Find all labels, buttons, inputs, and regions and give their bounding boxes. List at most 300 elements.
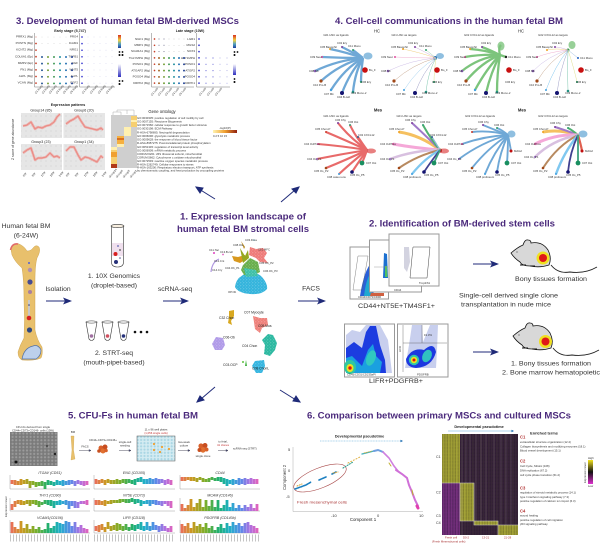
network: HSC as ligands, HC: C02 Ery xyxy=(337,41,348,45)
text block: enriched terms: cell cycle phase transition (61.2) xyxy=(520,473,560,477)
line charts: expression patterns: 9W xyxy=(31,172,37,178)
dot plot: early stage: PRRX1 (Mg) xyxy=(16,34,33,38)
dot plot: late stage: HLY1MPH xyxy=(181,56,195,60)
line charts: expression patterns: Expression patterns xyxy=(51,103,85,107)
dot plot: early stage: FGF2 xyxy=(70,80,78,84)
panel: cell-cell communications xyxy=(304,16,593,179)
network: CXCL12 as targets, HC: C07 Mk xyxy=(540,92,550,96)
line charts: expression patterns: 12W xyxy=(83,170,90,178)
diagram: CFU-F workflow: CD44+CD73+CD146+ xyxy=(89,438,117,442)
legend: heatmap colour bar: Low xyxy=(588,484,594,488)
diagram: CFU-F workflow xyxy=(71,428,257,461)
diagram: CFU-F workflow: 11 x 96 well plates xyxy=(145,428,168,432)
network: HSC as ligands, Mes: C05 Chon-P xyxy=(315,127,331,131)
network: HSC as targets, HC: Bo_F xyxy=(441,68,448,72)
dot plot: late stage: KRPK2 (Mg) xyxy=(133,81,150,85)
network: CXCL12 as targets, HC: C08 NK xyxy=(525,69,535,73)
panel: development of MSCs xyxy=(11,16,239,179)
chart: FACS density right: PDGFRB xyxy=(417,372,429,376)
arrow: to mouse 1 xyxy=(473,260,499,268)
arrow: scRNA-seq: scRNA-seq xyxy=(158,286,192,293)
dot plot: early stage: C2 Early xyxy=(41,83,51,95)
chart: FACS density left xyxy=(344,324,394,377)
panel: primary vs cultured MSCs xyxy=(282,410,594,544)
text block: gene ontology terms: GO:0009628: the response of blood tissue factor xyxy=(137,138,197,142)
network: CXCL12 as targets, Mes: C07 Ost xyxy=(582,161,592,165)
network: HSC as ligands, Mes: C06 Ost xyxy=(348,120,358,124)
chart: pseudotime trajectory: 10 xyxy=(419,513,424,518)
dot plot: early stage: TGFB1 xyxy=(68,54,78,58)
text: 10X Genomics xyxy=(88,273,141,290)
chart: stacked FACS gates: Trop2/61 xyxy=(419,281,431,285)
icon: STRT-seq wells xyxy=(86,321,148,340)
chart: UMAP of BM stromal cells: C06.Ob_P3 xyxy=(263,269,278,273)
text block: gene ontology terms: by chemiosmotic coupling, and heat production by uncoupling proteins xyxy=(137,168,225,172)
chart: pseudotime heatmap xyxy=(432,425,518,544)
chart: stacked FACS gates xyxy=(350,234,439,299)
heading: section 1: 1. Expression landscape of xyxy=(180,212,307,222)
chart: violin plots of marker genes: PDGFRB (CD140b) xyxy=(204,516,236,520)
icon: mouse 2 xyxy=(513,323,599,355)
text block: enriched terms: p53 signaling pathway xyxy=(520,522,548,526)
network: HSC as targets, Mes: C07 Ost xyxy=(438,161,448,165)
chart: pseudotime trajectory: -5 xyxy=(286,494,290,499)
text block: gene ontology terms: GO:0072593: reactive oxygen species metabolic process xyxy=(137,159,208,163)
chart: stacked FACS gates: CD44 xyxy=(394,288,402,292)
network: HSC as targets, HC: C11 Mono xyxy=(419,44,432,48)
network: CXCL12 as ligands, Mes: C08 prolineum xyxy=(476,175,495,179)
arrows: between sections xyxy=(196,187,300,402)
network: HSC as targets, Mes: C05 Os_P5 xyxy=(424,173,439,177)
network: CXCL12 as targets, Mes: C04 Os_P1 xyxy=(524,155,539,159)
chart: pseudotime trajectory: 0 xyxy=(288,468,291,473)
dot plot: early stage: C1 Early xyxy=(34,83,44,95)
legend: heatmap colour bar xyxy=(583,456,594,488)
diagram: CFU-F workflow: 41 clones xyxy=(217,443,230,447)
text block: gene ontology terms: -log10(P) xyxy=(219,126,231,130)
text: LIFR+PDGFRB+: LIFR+PDGFRB+ xyxy=(369,378,423,385)
text: transplantation note xyxy=(459,292,558,308)
network: HSC as ligands, Mes xyxy=(304,114,376,179)
chart: stacked FACS gates: CD44/CD73/CD90 xyxy=(358,295,381,299)
dot plot: early stage: ICAM1 xyxy=(69,41,78,45)
diagram: CFU-F workflow: culture xyxy=(180,444,189,448)
dot plot: late stage: POSO1 (Mg) xyxy=(133,62,150,66)
network: CXCL12 as targets, Mes xyxy=(524,114,593,179)
network: CXCL12 as targets, Mes: C05 Os_P5 xyxy=(566,173,581,177)
text block: enriched terms: wound healing xyxy=(520,514,538,518)
dot plot: early stage: ALPL xyxy=(71,74,78,78)
icon: femur bone xyxy=(10,243,42,360)
network: CXCL12 as ligands, Mes: C04 Os_P1 xyxy=(447,157,462,161)
chart: pseudotime trajectory: Component 2 xyxy=(282,464,287,490)
network: HSC as ligands, Mes: C02 CXCL12 xyxy=(358,133,375,137)
diagram: CFU-F workflow: scRNA seq (STRT) xyxy=(233,446,257,450)
text block: gene ontology terms xyxy=(137,109,237,172)
diagram: CFU-F workflow: two-week xyxy=(178,440,191,444)
network: CXCL12 as ligands, HC: C07 Mk xyxy=(468,92,478,96)
dot plot: late stage: C3 Late xyxy=(164,86,173,97)
network: HSC as ligands, Mes: G01 HSC as ligands xyxy=(323,114,349,118)
dot plot: early stage: WNT5 xyxy=(70,68,78,72)
text block: gene ontology terms: GO:0030335: positive regulation of cell motility by cell xyxy=(137,116,204,120)
text: mouse 2 outcomes: 1. Bony tissues formation xyxy=(511,360,591,368)
network: CXCL12 as targets, Mes: C05 Chon-P xyxy=(533,127,549,131)
network: HSC as ligands, HC: C05 Basophil xyxy=(320,45,337,49)
dot plot: late stage: C1 Late xyxy=(198,86,207,97)
network: HSC as targets, HC: C05 Basophil xyxy=(391,45,408,49)
chart: UMAP of cartilage cells: C03.OCP xyxy=(223,363,238,367)
chart: pseudotime trajectory: Fresh mesenchymal cells xyxy=(297,500,347,504)
network: HSC as ligands, HC: C07 Mk xyxy=(324,92,334,96)
dot plot: early stage: ALPL (Mg) xyxy=(19,74,33,78)
diagram: CFU-F workflow: single clone xyxy=(196,454,211,458)
line charts: expression patterns: 24W xyxy=(58,170,65,178)
chart: violin plots of marker genes: THY1 (CD90) xyxy=(39,494,61,498)
text block: enriched terms: C1 xyxy=(520,434,526,440)
dot plot: late stage: LGR1 xyxy=(187,37,195,41)
network: CXCL12 as ligands, HC: C04 B-cell xyxy=(482,95,495,99)
dot plot: late stage: MGS2 xyxy=(186,43,195,47)
arrow: FACS: FACS xyxy=(302,286,320,292)
network: CXCL12 as ligands, Mes: C06 Ost xyxy=(494,123,504,127)
arrow: isolation: Isolation xyxy=(45,286,71,293)
network: CXCL12 as ligands, Mes: C07 Ost xyxy=(511,161,521,165)
network: HSC as targets, HC: G01 HSC as targets xyxy=(391,33,417,37)
line charts: expression patterns: 12W xyxy=(40,170,47,178)
diagram: CFU-F workflow: FACS xyxy=(81,444,89,448)
chart: UMAP of BM stromal cells: C13.B.cell xyxy=(220,250,233,254)
text block: enriched terms: C3 xyxy=(520,486,526,490)
network: HSC as targets, Mes xyxy=(380,114,449,179)
dot plot: late stage: POSO4 (Mg) xyxy=(133,74,150,78)
network: CXCL12 as ligands, Mes: C06 Chy xyxy=(478,120,489,124)
dot plot: early stage: C4 Early xyxy=(55,83,65,95)
heading: section 5: 5. CFU-Fs in human fetal BM xyxy=(68,410,198,422)
network: HSC as targets, Mes: C02 CXCL12 xyxy=(430,133,447,137)
network: HSC as targets, HC: C08 NK xyxy=(381,69,391,73)
dot plot: early stage: C1 Early xyxy=(81,83,91,95)
network: HSC as targets, Mes: G01 HSC as targets xyxy=(396,114,422,118)
dot plot: early stage: Early stage (5,747) xyxy=(54,29,87,33)
diagram: CFU-F workflow: (1,056 single cells) xyxy=(144,431,168,435)
network: HSC as ligands, Mes: C05 Os_P2 xyxy=(314,169,329,173)
chart: UMAP of BM stromal cells: C03.Dma xyxy=(245,238,257,242)
dot plot: late stage: ATGP2 xyxy=(185,68,195,72)
network: HSC as targets, Mes: C06 Chy xyxy=(405,118,416,122)
label: Mes xyxy=(374,108,527,112)
chart: pseudotime heatmap: D0-2 xyxy=(463,536,470,540)
chart: pseudotime heatmap: 13-21 xyxy=(482,536,490,540)
dot plot: late stage: POSO4 xyxy=(185,74,195,78)
network: CXCL12 as targets, HC: C04 B-cell xyxy=(553,95,566,99)
dot plot: late stage: TGLYMPH (Mg) xyxy=(129,56,150,60)
dot plot: early stage: VCAN (Mg) xyxy=(18,80,33,84)
dot plot: early stage: KCNT2 (Mg) xyxy=(16,48,33,52)
network: CXCL12 as targets, HC: C03 Mono-2 xyxy=(565,91,581,95)
chart: pseudotime heatmap: C2 xyxy=(436,490,441,494)
network: CXCL12 as targets, HC: G02 CXCL12 as targets xyxy=(538,33,568,37)
network: CXCL12 as ligands, HC: C10 Pro-B xyxy=(457,83,470,87)
line charts: expression patterns: 18W xyxy=(92,170,99,178)
chart: UMAP of cartilage cells: C32 Chon xyxy=(219,316,234,320)
network: CXCL12 as ligands, HC: C08 NK xyxy=(453,69,463,73)
network: CXCL12 as targets, HC xyxy=(525,33,593,99)
network: HSC as ligands, HC: C04 B-cell xyxy=(337,95,350,99)
chart: pseudotime heatmap: C4 xyxy=(436,521,441,525)
network: HSC as targets, HC xyxy=(381,33,448,99)
heatmap: gene ontology: Group3 xyxy=(122,169,131,179)
network: CXCL12 as targets, Mes: C04 OxPhos xyxy=(525,142,541,146)
chart: violin plots of marker genes: ITGAV (CD51) xyxy=(38,471,62,475)
network: HSC as targets, HC: C03 Mono-2 xyxy=(422,91,438,95)
network: CXCL12 as targets, Mes: C06 Ost xyxy=(565,123,575,127)
chart: violin plots of marker genes: ENG (CD105) xyxy=(123,471,145,475)
network: HSC as ligands, HC xyxy=(309,33,376,99)
network: HSC as ligands, HC: C08 NK xyxy=(309,69,319,73)
chart: FACS density left: CD45/CD31/CD235aPI xyxy=(347,372,376,376)
network: HSC as ligands, Mes: C07 Ost xyxy=(366,161,376,165)
network: CXCL12 as targets, Mes: G02 CXCL12 as targets xyxy=(538,114,568,118)
dot plot: early stage: POSTN (Mg) xyxy=(16,41,33,45)
text block: gene ontology terms: R-HSA-8957275: Post-translational protein phosphorylation xyxy=(137,141,211,145)
text: bony tissues formation: Bony tissues formation xyxy=(515,276,587,283)
chart: violin plots of marker genes: MCAM (CD146) xyxy=(207,494,233,498)
chart: pseudotime trajectory xyxy=(282,434,424,522)
dot plot: late stage: NGF1 (Mg) xyxy=(135,37,150,41)
chart: pseudotime trajectory: 5 xyxy=(288,447,291,452)
dot plot: late stage: C3 Late xyxy=(214,86,223,97)
network: CXCL12 as ligands, Mes: C05 Chon-P xyxy=(462,127,478,131)
label: HC: HC xyxy=(518,28,524,34)
diagram: CFU-F workflow: seeding xyxy=(120,444,130,448)
diagram: CFU-F workflow: single-cell xyxy=(119,440,132,444)
heatmap: gene ontology xyxy=(108,110,138,179)
chart: pseudotime trajectory: Component 1 xyxy=(350,517,377,522)
text block: enriched terms: C2 xyxy=(520,458,526,464)
network: CXCL12 as ligands, HC xyxy=(453,33,521,99)
icon: mouse 1 xyxy=(511,240,597,272)
text block: enriched terms: positive regulation of calcium ion import (6.3) xyxy=(520,499,576,503)
arrow: to mouse 2 xyxy=(473,348,499,356)
chart: pseudotime heatmap: (Fresh Mesenchymal cells) xyxy=(432,540,465,544)
dot plot: late stage: Late stage (10W) xyxy=(176,29,205,33)
heatmap: gene ontology: Group14 xyxy=(108,167,118,179)
chart: UMAP of BM stromal cells: OP.Ob xyxy=(228,290,237,294)
line charts: expression patterns xyxy=(11,103,108,178)
chart: pseudotime heatmap: Fresh cell xyxy=(445,536,458,540)
network: HSC as targets, Mes: C05 Os_P2 xyxy=(390,169,405,173)
label: Mes: Mes xyxy=(518,108,527,112)
chart: pseudotime trajectory: Developmental pseudotime xyxy=(335,434,384,438)
arrow: scRNA-seq xyxy=(158,286,192,304)
text block: gene ontology terms: GO:0006096: glycolysis metabolic process xyxy=(137,134,190,138)
arrow: isolation xyxy=(45,286,72,304)
text block: gene ontology terms: R-HSA-6798695: Neutrophil degranulation xyxy=(137,130,190,134)
diagram: CFU-F workflow: to fetal, xyxy=(218,440,228,444)
dot plot: early stage: MMP2 (Ep) xyxy=(18,61,33,65)
text: 10X Genomics: (droplet-based) xyxy=(91,282,137,290)
text block: enriched terms: DNA replication (67.2) xyxy=(520,468,547,472)
text: CD44+NT5E+TM4SF1+: CD44+NT5E+TM4SF1+ xyxy=(358,303,435,310)
dot plot: late stage xyxy=(129,29,238,97)
chart: UMAP of BM stromal cells: C05.Ob_P2 xyxy=(259,261,274,265)
network: CXCL12 as ligands, HC: C09 Neut xyxy=(454,55,466,59)
image: culture plate xyxy=(10,425,58,466)
network: HSC as ligands, Mes: C05 Os_P5 xyxy=(350,173,365,177)
heatmap: gene ontology: Group6 xyxy=(115,169,124,179)
arrow: FACS xyxy=(298,286,326,304)
network: CXCL12 as ligands, Mes: G02 CXCL12 as ligands xyxy=(465,114,496,118)
network: HSC as targets, HC: C09 Neut xyxy=(381,55,393,59)
network: CXCL12 as ligands, HC: C03 Mono-2 xyxy=(495,91,511,95)
line charts: expression patterns: 6W xyxy=(65,172,71,178)
line charts: expression patterns: 24W xyxy=(101,170,108,178)
network: HSC as ligands, HC: C06 Ery xyxy=(361,80,372,84)
text block: enriched terms: Blood vessel development (15.1) xyxy=(520,448,561,452)
network: HSC as ligands, Mes: C06 Chy xyxy=(335,118,346,122)
network: HSC as targets, HC: C06 Ery xyxy=(432,80,443,84)
network: HSC as targets, HC: C07 Mk xyxy=(396,92,406,96)
chart: pseudotime heatmap: 21-28 xyxy=(504,536,512,540)
line charts: expression patterns: Group3 (23) xyxy=(31,140,51,144)
text block: enriched terms xyxy=(520,432,586,526)
line charts: expression patterns: 9W xyxy=(74,172,80,178)
text block: enriched terms: positive regulation of cell migration xyxy=(520,518,563,522)
dot plot: late stage: C2 Late xyxy=(157,86,166,97)
line charts: expression patterns: 6W xyxy=(22,172,28,178)
chart: UMAP of BM stromal cells: C12.Cnt xyxy=(214,259,224,263)
chart: UMAP of cartilage cells: C06-Ob xyxy=(223,336,235,340)
network: CXCL12 as ligands, HC: C05 Basophil xyxy=(460,45,477,49)
chart: UMAP of cartilage cells: C08.ChonL xyxy=(252,366,269,370)
network: CXCL12 as ligands, HC: C02 Ery xyxy=(481,41,492,45)
dot plot: early stage: C4 Early xyxy=(105,83,115,95)
network: CXCL12 as ligands, Mes: C05 Os_P5 xyxy=(495,173,510,177)
text block: gene ontology terms: 0.2 5 10 15 xyxy=(213,134,227,138)
network: HSC as ligands, HC: C11 Mono xyxy=(348,44,361,48)
dot plot: early stage: NGF xyxy=(72,61,78,65)
chart: pseudotime trajectory: 0 xyxy=(377,513,380,518)
line charts: expression patterns: 18W xyxy=(49,170,56,178)
panel: CFU-Fs xyxy=(4,410,260,538)
text block: enriched terms: Cell Cycle, Mitotic (108) xyxy=(520,464,550,468)
dot plot: early stage: C5 Early xyxy=(62,83,72,95)
network: HSC as targets, HC: C04 B-cell xyxy=(410,95,423,99)
chart: pseudotime heatmap: C1 xyxy=(436,455,441,459)
dot plot: late stage: C2 Late xyxy=(206,86,215,97)
chart: pseudotime trajectory: -10 xyxy=(331,513,338,518)
chart: FACS density right: LIFR xyxy=(398,346,402,352)
text block: gene ontology terms: GO:0071560: cellular response to growth factor stimulus xyxy=(137,123,207,127)
text: 10X Genomics: 1. 10X Genomics xyxy=(88,273,141,280)
heatmap: gene ontology: Group1 xyxy=(129,169,138,179)
network: HSC as ligands, Mes: C08 osteo-Low xyxy=(327,175,347,179)
chart: UMAP of BM stromal cells: C08.Ole xyxy=(233,243,244,247)
network: HSC as targets, Mes: C08 prolineum xyxy=(403,175,422,179)
dot plot: early stage: C2 Early xyxy=(89,83,99,95)
text: human fetal BM xyxy=(2,223,51,240)
dot plot: early stage: NRG1 xyxy=(70,48,78,52)
diagram: CFU-F workflow: BM xyxy=(71,430,76,434)
text block: gene ontology terms: CORUM:5662: Cytochrome c oxidase mitochondrial xyxy=(137,156,202,160)
chart: UMAP of BM stromal cells: C04.Ob_P1 xyxy=(225,266,240,270)
dot plot: late stage: C5 Late xyxy=(178,86,187,97)
network: CXCL12 as ligands, HC: C06 Ery xyxy=(505,80,516,84)
chart: UMAP of cartilage cells: C05.Mus xyxy=(258,324,272,328)
chart: violin plots of marker genes: Expression level xyxy=(4,496,8,517)
heading: section 6: 6. Comparison between primary MSCs and cultured MSCs xyxy=(307,410,571,422)
network: CXCL12 as ligands, HC: Bo_F xyxy=(513,68,520,72)
chart: FACS density right xyxy=(398,324,448,377)
network: CXCL12 as targets, Mes: C08 prolineum xyxy=(548,175,567,179)
text: STRT-seq xyxy=(83,350,145,366)
text: human fetal BM: Human fetal BM xyxy=(2,223,51,230)
text block: enriched terms: regulation of steroid metabolic process (14.1) xyxy=(520,490,576,494)
dot plot: early stage: PRG4 xyxy=(70,34,78,38)
text block: gene ontology terms: Gene ontology xyxy=(148,109,177,114)
heading: section 2: 2. Identification of BM-derived stem cells xyxy=(369,218,555,230)
chart: violin plots of marker genes: VCAM1(CD106) xyxy=(37,516,63,520)
network: HSC as targets, Mes: C04 Os_P1 xyxy=(380,157,395,161)
text block: gene ontology terms: GO:0030198: ECM Pathway xyxy=(137,127,173,131)
network: CXCL12 as targets, Mes: MAG2 xyxy=(585,149,593,153)
dot plot: late stage: MMP1 (Mg) xyxy=(134,43,150,47)
network: CXCL12 as ligands, HC: C11 Mono xyxy=(508,55,521,59)
text block: enriched terms: Enriched terms xyxy=(530,432,558,436)
network: CXCL12 as targets, HC: C05 Basophil xyxy=(536,45,553,49)
legend: heatmap colour bar: High xyxy=(588,456,594,460)
chart: FACS density right: 19.3% xyxy=(424,333,432,337)
label: HC: HC xyxy=(374,28,380,34)
network: HSC as targets, Mes: C05 Chon-P xyxy=(389,127,405,131)
line charts: expression patterns: Group14 (85) xyxy=(30,108,52,112)
chart: violin plots of marker genes: CD44 xyxy=(215,471,225,475)
line charts: expression patterns: Group1 (34) xyxy=(74,140,94,144)
text block: enriched terms: type I interferon signaling pathway (7.3) xyxy=(520,495,569,499)
dot plot: late stage: C1 Late xyxy=(150,86,159,97)
line charts: expression patterns: Group6 (20) xyxy=(74,108,94,112)
panel: identification of stem cells xyxy=(298,218,600,385)
text: transplantation note: Single-cell derived single clone xyxy=(459,292,558,300)
image: culture plate: CFU-Fs derived from single xyxy=(16,425,51,429)
legend: heatmap colour bar: Expression level xyxy=(583,462,587,483)
chart: UMAP of BM stromal cells: C14.Cry xyxy=(212,268,223,272)
text block: gene ontology terms: R-HSA-2262749: Cellular responses to stress xyxy=(137,162,194,166)
network: CXCL12 as targets, HC: Bo_F xyxy=(585,68,592,72)
chart: pseudotime heatmap: Developmental pseudotime xyxy=(454,425,504,429)
chart: UMAP of cartilage cells xyxy=(212,310,277,373)
text: mouse 2 outcomes: 2. Bone marrow hematopoietic xyxy=(502,370,600,376)
panel: expression landscape xyxy=(177,212,309,373)
text block: gene ontology terms: R-HSA-163200: Respiratory electron transport, ATP synthesis xyxy=(137,166,214,170)
dot plot: early stage: FN1 (Mg) xyxy=(20,68,33,72)
dot plot: late stage: SCARA1 (Mg) xyxy=(131,49,150,53)
chart: UMAP of cartilage cells: C04 Chon xyxy=(242,344,257,348)
network: HSC as targets, HC: C02 Ery xyxy=(408,41,419,45)
text: transplantation note: transplantation in nude mice xyxy=(461,302,551,308)
text: STRT-seq: (mouth-pipet-based) xyxy=(83,360,145,366)
line charts: expression patterns: Z score of gene abundance xyxy=(11,119,15,160)
network: HSC as ligands, Mes: C04 Os_P1 xyxy=(307,157,322,161)
network: HSC as ligands, HC: Bo_F xyxy=(369,68,376,72)
icon: test tube xyxy=(111,224,124,267)
chart: pseudotime heatmap: C3 xyxy=(436,514,441,518)
network: HSC as targets, Mes: C06 Ost xyxy=(420,120,430,124)
chart: UMAP of cartilage cells: C07 Myocyte xyxy=(244,310,264,314)
dot plot: late stage: KRPK1 xyxy=(185,81,195,85)
network: CXCL12 as targets, HC: C10 Pro-B xyxy=(529,83,542,87)
